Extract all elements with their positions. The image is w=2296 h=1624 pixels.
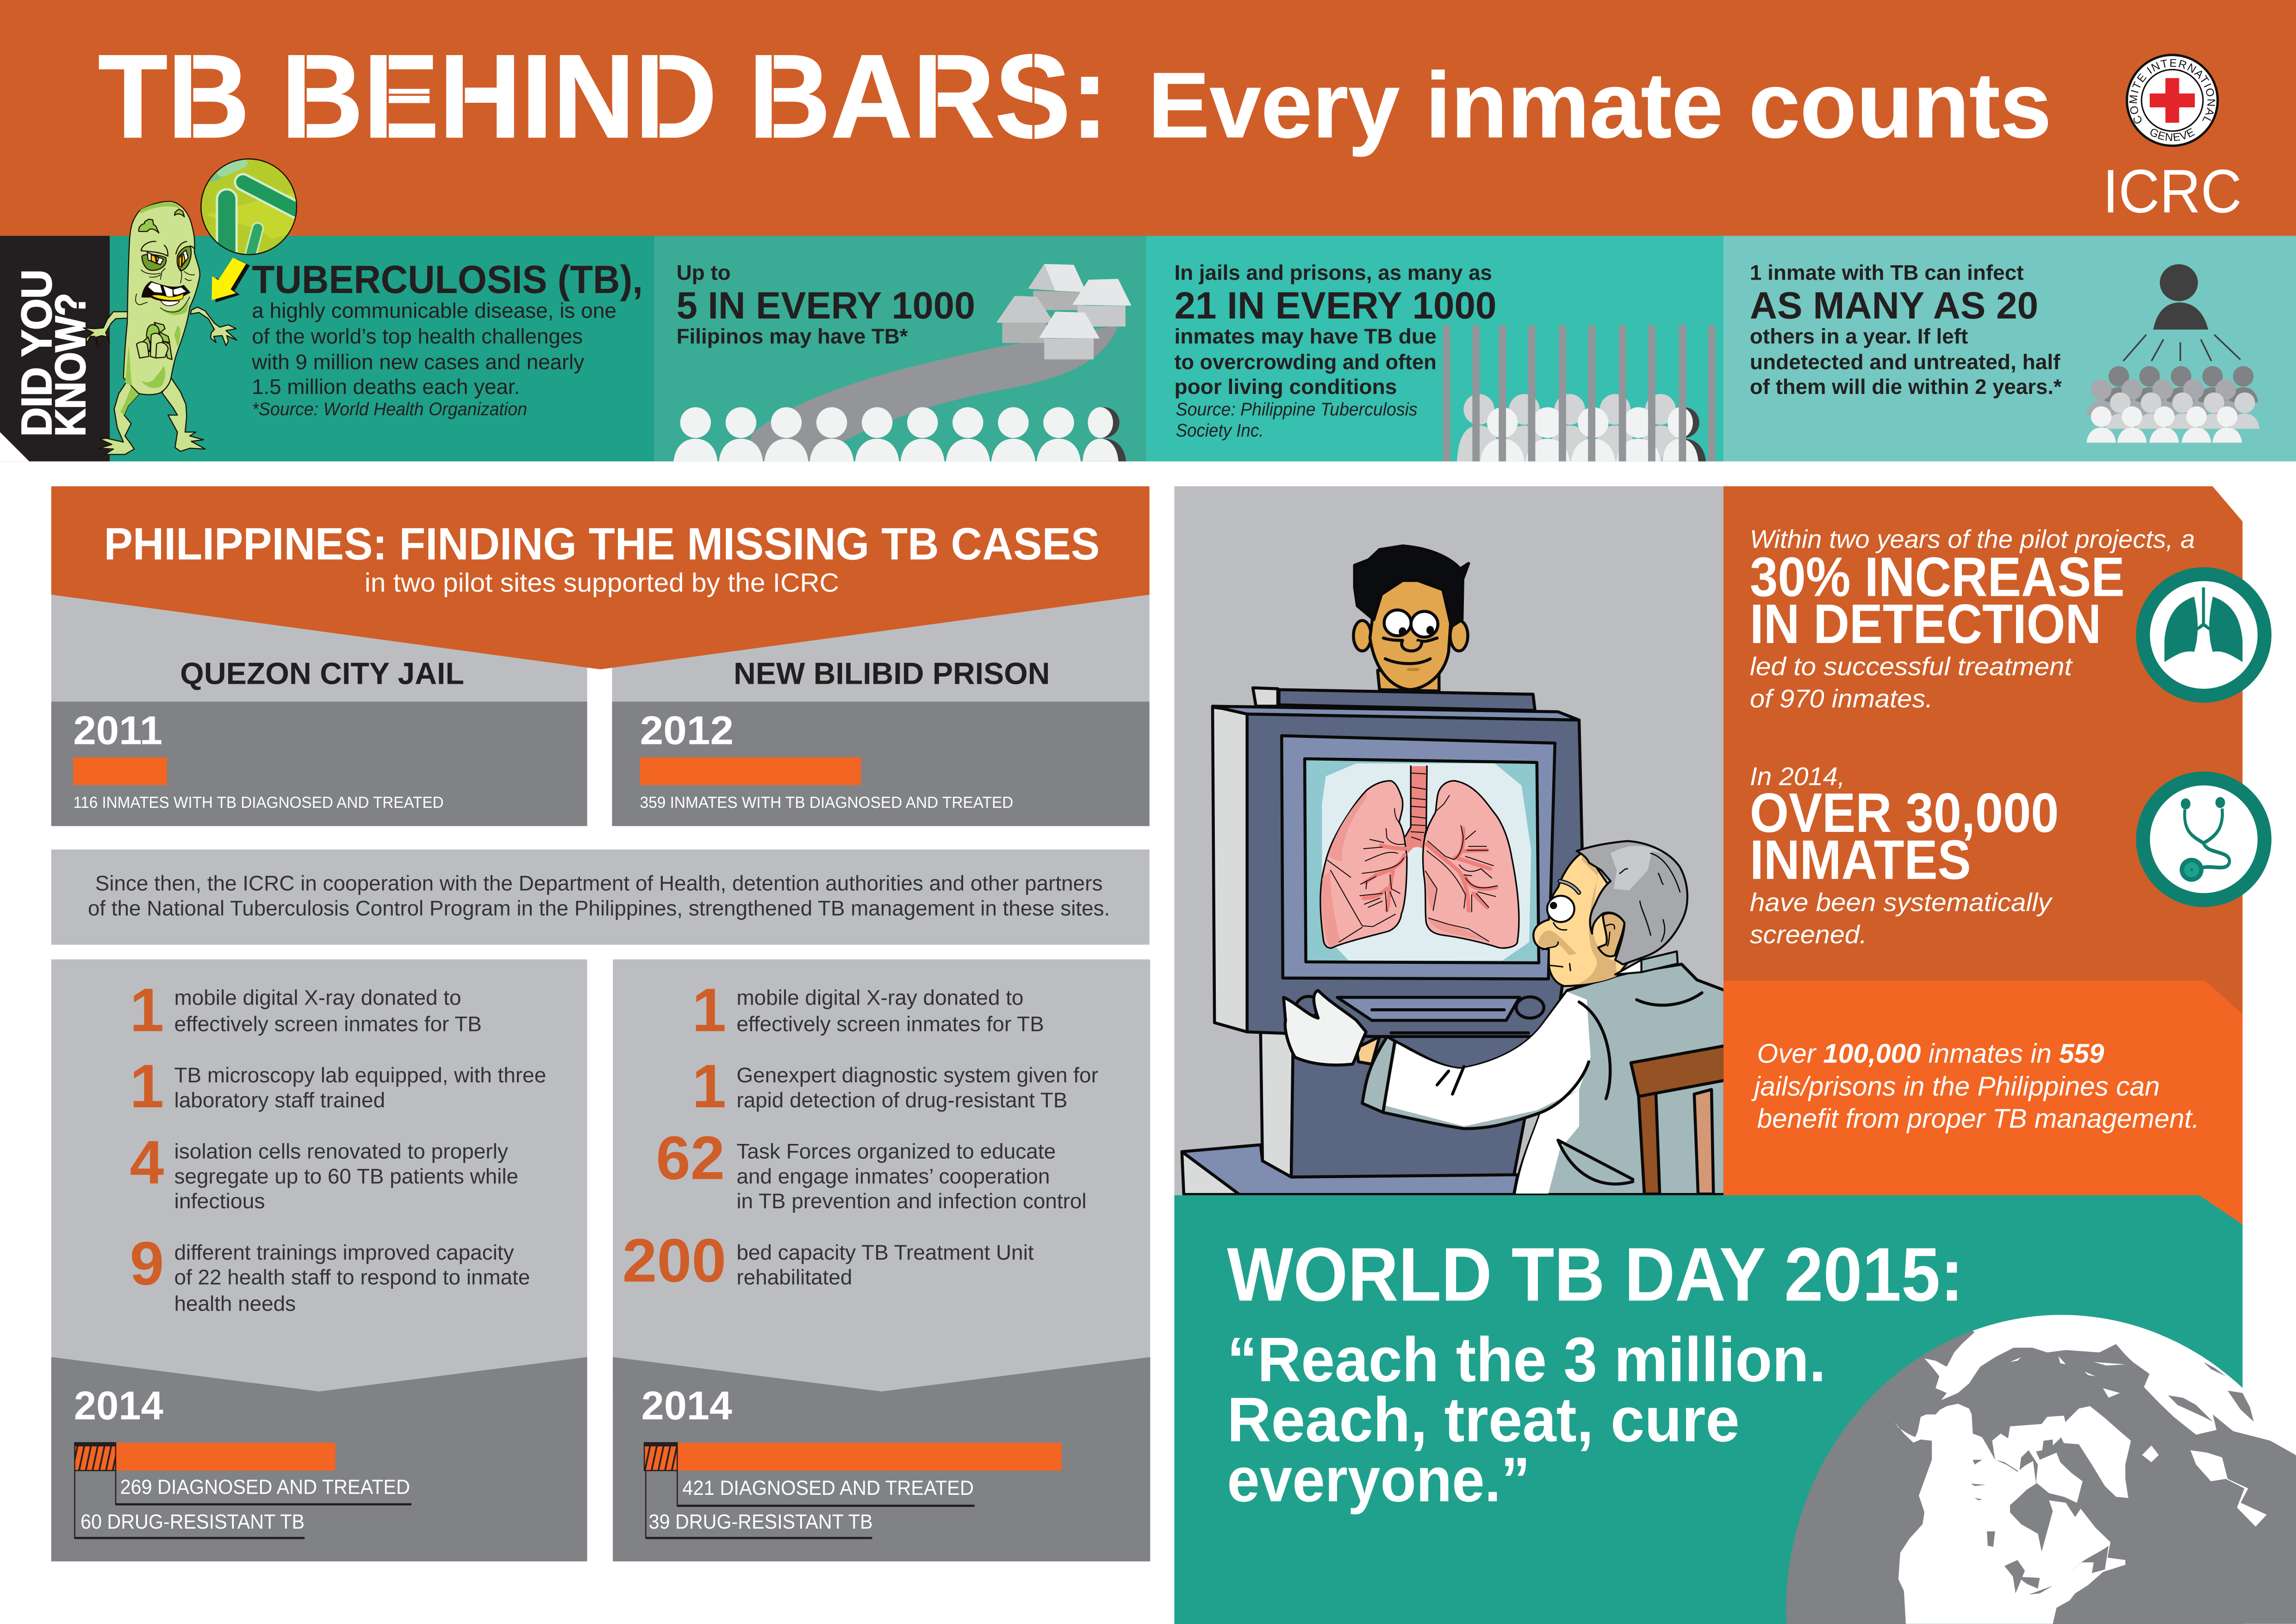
list item: x-ray: mobile digital X-ray donated to xyxy=(736,987,1024,1011)
chart: 2014 Quezon City bar xyxy=(74,1383,411,1539)
text: over 30,000 inmates: have been systematically xyxy=(1750,887,2053,917)
list item: x-ray: effectively screen inmates for TB xyxy=(736,1013,1044,1037)
stat text xyxy=(677,262,975,350)
panel: 5 in every 1000 xyxy=(673,262,1132,462)
panel: tuberculosis text: with 9 million new cases and nearly xyxy=(250,351,585,375)
stat text: 1 inmate with TB can infect xyxy=(1750,262,2024,286)
New Bilibid Prison 2012: NEW BILIBID PRISON xyxy=(734,658,1050,691)
icon: globe xyxy=(1786,1298,2296,1624)
title: TB BEHIND BARS: xyxy=(98,32,1108,163)
logo wordmark: ICRC xyxy=(2103,157,2242,225)
list item: microscopy lab xyxy=(130,1052,546,1120)
list item: microscopy lab: TB microscopy lab equipped, with three xyxy=(174,1065,546,1088)
quote xyxy=(1227,1325,1826,1516)
stat text: of them will die within 2 years.* xyxy=(1750,376,2062,400)
callout: 100,000 inmates: benefit from proper TB management. xyxy=(1757,1103,2199,1134)
header band xyxy=(0,0,2296,237)
stat text: AS MANY AS 20 xyxy=(1750,283,2038,327)
stat text: others in a year. If left xyxy=(1750,326,1968,350)
list item: isolation cells: isolation cells renovated to properly xyxy=(174,1141,509,1164)
heading: WORLD TB DAY 2015: xyxy=(1227,1233,1964,1318)
panel: tuberculosis text: a highly communicable disease, is one xyxy=(252,300,616,324)
germ mouth xyxy=(136,281,190,312)
chart: 2014 Quezon City bar: 60 DRUG-RESISTANT TB xyxy=(81,1510,305,1533)
New Bilibid Prison 2012: 359 INMATES WITH TB DIAGNOSED AND TREATED xyxy=(640,794,1014,812)
quote: Reach, treat, cure xyxy=(1227,1386,1740,1456)
list item: task forces: Task Forces organized to educate xyxy=(736,1141,1056,1164)
patient xyxy=(1353,546,1468,691)
panel: Philippines pilot sites xyxy=(51,486,1150,826)
text: 30% increase: led to successful treatment xyxy=(1750,652,2074,681)
panel: detection results xyxy=(1724,486,2265,1025)
list item: x-ray xyxy=(130,975,482,1044)
text: 30% increase: 30% INCREASE xyxy=(1750,548,2125,609)
list item: task forces: 62 xyxy=(656,1124,725,1192)
callout: 100,000 inmates: jails/prisons in the Philippines can xyxy=(1750,1071,2160,1101)
logo: ICRC emblem: COMITE INTERNATIONAL xyxy=(2127,56,2218,126)
did you know strip backgrounds xyxy=(110,236,2296,462)
stat text xyxy=(1750,262,2062,400)
icon: lungs xyxy=(2143,574,2265,696)
subtitle: Every inmate counts xyxy=(1148,55,2052,158)
list item: trainings: of 22 health staff to respond to inmate xyxy=(174,1267,530,1290)
illustration panel: x-ray machine, patient and doctor xyxy=(1174,486,1725,1195)
New Bilibid Prison 2012 xyxy=(612,586,1150,826)
list item: isolation cells: 4 xyxy=(130,1128,165,1197)
stat text: 5 IN EVERY 1000 xyxy=(677,283,975,327)
list item: isolation cells: infectious xyxy=(174,1191,265,1214)
list item: x-ray: 1 xyxy=(130,975,164,1044)
icon: inmates behind bars xyxy=(1443,325,1716,462)
text: 30% increase: Within two years of the pilot projects, a xyxy=(1750,525,2196,554)
chart: 2014 New Bilibid bar: 2014 xyxy=(641,1383,733,1428)
stat text: inmates may have TB due xyxy=(1174,326,1437,350)
Quezon City Jail 2011: 116 INMATES WITH TB DIAGNOSED AND TREATED xyxy=(73,794,444,812)
list item: bed capacity: bed capacity TB Treatment Unit xyxy=(736,1242,1034,1266)
Quezon City Jail 2011: QUEZON CITY JAIL xyxy=(180,658,464,691)
chart: 2014 New Bilibid bar xyxy=(641,1383,1062,1539)
stat text: Source: Philippine Tuberculosis xyxy=(1176,399,1418,420)
heading banner xyxy=(51,486,1150,669)
doctor head xyxy=(1533,841,1687,986)
panel: tuberculosis text: 1.5 million deaths each year. xyxy=(252,376,520,400)
Quezon City Jail 2011: 2011 xyxy=(73,707,162,753)
New Bilibid Prison 2012: 2012 xyxy=(640,707,734,753)
stat text: In jails and prisons, as many as xyxy=(1174,262,1492,286)
panel: tuberculosis text: TUBERCULOSIS (TB), xyxy=(252,258,643,302)
icon: stethoscope xyxy=(2143,779,2265,900)
quote: everyone.” xyxy=(1227,1446,1530,1516)
quote: “Reach the 3 million. xyxy=(1227,1325,1826,1396)
germ warts and fist xyxy=(137,209,184,360)
panel: World TB Day xyxy=(1174,1195,2296,1624)
list item: trainings: different trainings improved capacity xyxy=(174,1242,515,1266)
text block: since then xyxy=(51,849,1150,945)
text: over 30,000 inmates: In 2014, xyxy=(1750,762,1845,791)
panel: tuberculosis text xyxy=(250,258,643,419)
text: over 30,000 inmates: OVER 30,000 xyxy=(1750,784,2059,845)
arrow: yellow pointer xyxy=(212,258,250,302)
text: 30% increase: of 970 inmates. xyxy=(1750,684,1933,713)
text: over 30,000 inmates: screened. xyxy=(1750,920,1867,949)
list item: x-ray: effectively screen inmates for TB xyxy=(174,1013,482,1037)
stat text: poor living conditions xyxy=(1174,376,1397,400)
list item: bed capacity: rehabilitated xyxy=(736,1267,852,1290)
list item: bed capacity xyxy=(622,1226,1034,1295)
list item: task forces: in TB prevention and infection control xyxy=(736,1191,1087,1214)
callout: 100,000 inmates: Over 100,000 inmates in 559 xyxy=(1757,1038,2105,1068)
icon: road xyxy=(742,325,1118,461)
list item: x-ray xyxy=(692,975,1044,1044)
chair xyxy=(1631,1046,1725,1194)
stat text: to overcrowding and often xyxy=(1174,351,1437,375)
text: 30% increase xyxy=(1750,525,2196,713)
germ limbs xyxy=(83,307,237,455)
list item: bed capacity: 200 xyxy=(622,1226,726,1295)
germ body xyxy=(124,201,200,395)
list item: task forces xyxy=(656,1124,1087,1214)
list item: isolation cells: segregate up to 60 TB patients while xyxy=(174,1166,518,1189)
text block: since then: Since then, the ICRC in cooperation with the Department of Health, detention authorities and other partners xyxy=(95,873,1102,896)
icon: one infecting many xyxy=(2086,264,2259,443)
list item: trainings xyxy=(130,1229,530,1317)
icon: row of ten people xyxy=(673,407,1126,462)
panel: New Bilibid results xyxy=(613,959,1150,1562)
panel: did you know label: KNOW? xyxy=(48,293,95,437)
heading banner: in two pilot sites supported by the ICRC xyxy=(365,568,839,598)
doctor glove xyxy=(1283,990,1380,1065)
stat text: 21 IN EVERY 1000 xyxy=(1174,283,1497,327)
logo: ICRC emblem: GENEVE xyxy=(2147,125,2197,144)
list item: task forces: and engage inmates’ cooperation xyxy=(736,1166,1050,1189)
x-ray machine xyxy=(1182,688,1582,1194)
stat text: Up to xyxy=(677,262,731,286)
list item: trainings: health needs xyxy=(174,1293,296,1317)
panel: tuberculosis text: of the world’s top health challenges xyxy=(252,326,583,350)
list item: x-ray: mobile digital X-ray donated to xyxy=(174,987,461,1011)
chart: 2014 Quezon City bar: 269 DIAGNOSED AND TREATED xyxy=(120,1475,410,1499)
list item: isolation cells xyxy=(130,1128,518,1214)
panel: 21 in every 1000 xyxy=(1174,262,1716,462)
panel: did you know label: DID YOU xyxy=(15,269,62,437)
doctor collar xyxy=(1615,951,1678,974)
list item: microscopy lab: laboratory staff trained xyxy=(174,1090,385,1113)
chart: 2014 New Bilibid bar: 421 DIAGNOSED AND TREATED xyxy=(682,1476,974,1499)
text block: since then: of the National Tuberculosis Control Program in the Philippines, strengthened TB management in these sites. xyxy=(88,898,1110,921)
text: over 30,000 inmates: INMATES xyxy=(1750,831,1971,892)
list item: genexpert: Genexpert diagnostic system given for xyxy=(736,1065,1098,1088)
doctor coat and arm xyxy=(1362,964,1725,1194)
germ shading xyxy=(125,203,189,388)
x-ray lungs xyxy=(1320,766,1519,948)
illustration: TB bacillus character xyxy=(83,156,302,455)
Quezon City Jail 2011 xyxy=(51,586,587,826)
text: 30% increase: IN DETECTION xyxy=(1750,595,2101,656)
list item: genexpert xyxy=(692,1052,1098,1120)
list item: trainings: 9 xyxy=(130,1229,164,1298)
icon: microscope view of bacteria xyxy=(201,156,302,258)
icon: houses xyxy=(996,264,1132,359)
stat text: Society Inc. xyxy=(1176,420,1263,441)
stat text: undetected and untreated, half xyxy=(1750,351,2060,375)
panel: Quezon City results xyxy=(51,959,587,1562)
list item: microscopy lab: 1 xyxy=(130,1052,164,1120)
chart: 2014 Quezon City bar: 2014 xyxy=(74,1383,164,1428)
heading banner: PHILIPPINES: FINDING THE MISSING TB CASES xyxy=(104,518,1100,570)
list item: genexpert: rapid detection of drug-resistant TB xyxy=(736,1090,1067,1113)
callout: 100,000 inmates xyxy=(1724,981,2243,1230)
list item: x-ray: 1 xyxy=(692,975,726,1044)
panel: as many as 20 xyxy=(1750,262,2259,443)
panel: tuberculosis text: *Source: World Health Organization xyxy=(252,399,527,419)
chart: 2014 New Bilibid bar: 39 DRUG-RESISTANT TB xyxy=(649,1510,873,1533)
stat text: Filipinos may have TB* xyxy=(677,326,908,350)
germ eyes xyxy=(141,241,195,283)
stat text xyxy=(1174,262,1497,441)
text: over 30,000 inmates xyxy=(1750,762,2059,949)
list item: genexpert: 1 xyxy=(692,1052,726,1120)
panel: did you know label xyxy=(0,236,110,462)
